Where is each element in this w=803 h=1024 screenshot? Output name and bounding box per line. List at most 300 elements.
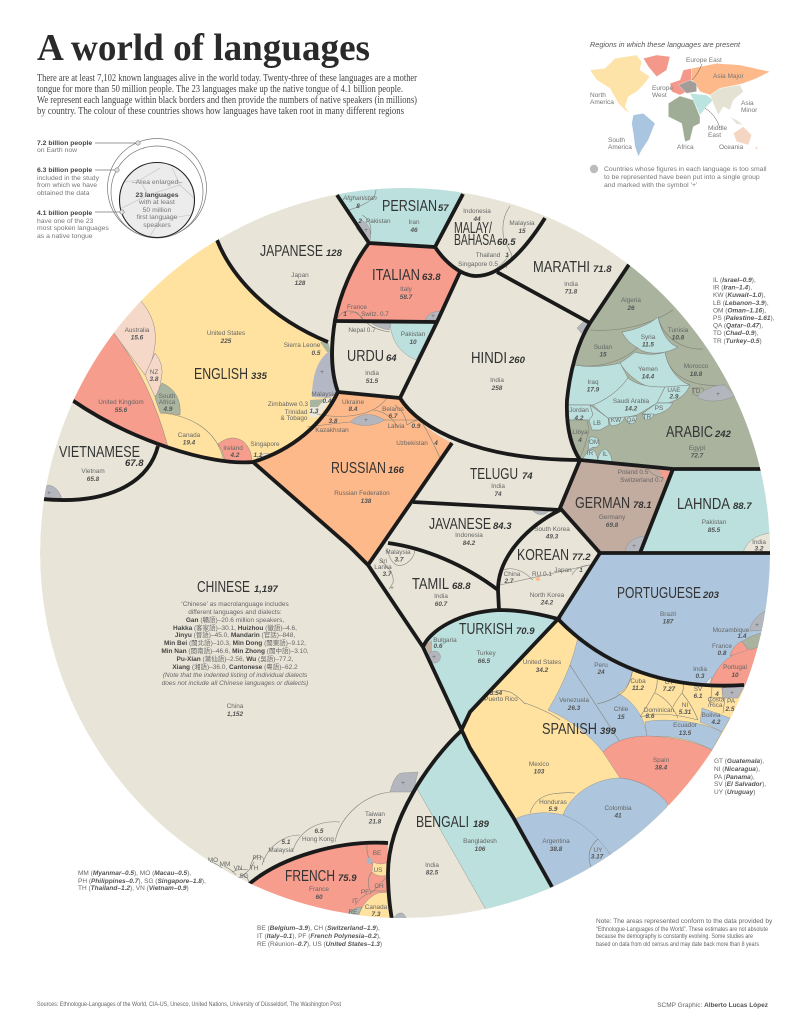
panel: Urdu <box>347 323 436 385</box>
panel: Turkish: Bulgaria <box>433 637 457 644</box>
legend: world map of regions: Regions in which these languages are present <box>590 40 741 49</box>
panel: Russian: 6.7 <box>389 413 398 420</box>
title: A world of languages <box>37 27 370 69</box>
panel: Korean: 2.7 <box>504 578 514 585</box>
panel: Spanish <box>464 622 746 890</box>
panel: Russian: Kazakhstan <box>315 427 349 434</box>
panel: Chinese: Min Bei (閩北語)–10.3, Min Dong (閩東語)–9.12, <box>164 638 306 647</box>
panel: Chinese: Xiang (湘語)–36.0, Cantonese (粵語)–62.2 <box>172 662 298 671</box>
legend: world map of regions: America <box>608 144 632 151</box>
panel: Malay / Bahasa: 60.5 <box>497 237 516 248</box>
panel: German: 69.8 <box>606 522 619 529</box>
note: Chinese abbreviations <box>78 870 206 892</box>
panel: Russian: Latvia <box>387 423 405 430</box>
panel: Persian: 46 <box>409 227 418 234</box>
panel: Chinese: PH <box>253 855 262 862</box>
panel: Arabic: TD <box>692 388 701 395</box>
legend: population circles: on Earth now <box>37 147 77 154</box>
note: Arabic abbreviations: QA (Qatar–0.47), <box>713 322 763 330</box>
panel: English: 15.6 <box>131 334 144 342</box>
panel: Lahnda: Pakistan <box>702 519 726 526</box>
panel: English: 4.9 <box>163 406 173 413</box>
panel: English <box>73 240 336 460</box>
note: French abbreviations: IT (Italy–0.1), PF (French Polynesia–0.2), <box>257 933 381 940</box>
panel: Arabic: 4 <box>577 437 582 444</box>
legend: world map of regions: Asia <box>741 100 754 107</box>
panel: Spanish: Ecuador <box>673 722 697 729</box>
panel: French: RE <box>349 909 357 916</box>
panel: Korean: 24.2 <box>540 600 554 606</box>
panel: Persian: 8 <box>356 203 360 210</box>
legend: world map of regions: Minor <box>741 107 758 114</box>
panel: Arabic: 72.7 <box>691 452 704 460</box>
panel: Persian: Afghanistan <box>342 195 377 202</box>
panel: Tamil <box>374 548 471 608</box>
panel: Arabic: Syria <box>641 334 655 341</box>
panel: Portuguese: 0.3 <box>696 673 705 680</box>
panel: Spanish: 2.5 <box>725 706 735 713</box>
panel: Telugu: 74 <box>494 491 502 498</box>
panel: Arabic: 11.5 <box>642 342 654 348</box>
panel: Hindi: HINDI <box>471 350 507 367</box>
panel: Spanish: 13.5 <box>679 730 692 737</box>
legend: population circles: –Area enlarged– <box>132 179 182 186</box>
intro text: by country. The colour of these countries shows how languages have taken root in many different regions <box>37 106 404 117</box>
panel: Chinese: 1,197 <box>254 584 278 595</box>
panel: Spanish: 3.54 <box>490 690 503 697</box>
note: Chinese abbreviations: TH (Thailand–1.2), VN (Vietnam–0.9) <box>78 885 189 892</box>
legend: population circles <box>37 138 206 240</box>
panel: Russian: 8.4 <box>349 406 358 413</box>
panel: Lahnda: 3.2 <box>755 546 764 552</box>
legend: world map of regions: North <box>590 92 606 99</box>
panel: Arabic: OM <box>589 439 599 446</box>
panel: Bengali: BENGALI <box>416 814 469 831</box>
panel: German: + <box>632 543 636 550</box>
panel: Italian: France <box>347 304 367 311</box>
legend: world map of regions: Oceania <box>719 144 744 151</box>
panel: English: 19.4 <box>183 440 196 446</box>
legend: population circles: first language <box>137 214 178 221</box>
note: Arabic abbreviations <box>713 277 775 345</box>
panel: Malay / Bahasa: Indonesia <box>463 208 491 215</box>
panel: German: Poland 0.5 <box>618 469 649 476</box>
panel: Chinese: Hong Kong <box>302 836 334 843</box>
panel: Arabic: Libya <box>572 429 588 436</box>
panel: Chinese: CHINESE <box>197 579 250 596</box>
legend: population circles: 6.3 billion people <box>37 167 92 174</box>
legend: world map of regions: America <box>590 99 614 106</box>
panel: Urdu: URDU <box>347 348 384 365</box>
panel: Spanish: 11.2 <box>632 685 644 692</box>
legend: world map of regions: Europe <box>652 85 673 92</box>
panel: Spanish: SPANISH <box>542 721 597 738</box>
panel: Chinese: China <box>227 703 243 710</box>
note: Arabic abbreviations: OM (Oman–1.16), <box>713 308 766 314</box>
panel: Portuguese <box>560 554 770 686</box>
panel: English: & Tobago <box>281 415 308 422</box>
panel: Arabic: + <box>716 391 720 398</box>
panel: Spanish: 7.27 <box>663 686 676 693</box>
panel: Arabic: Tunisia <box>668 327 688 334</box>
panel: Turkish: 0.6 <box>434 643 443 650</box>
panel: Portuguese: Brazil <box>660 611 676 618</box>
panel: French: CH <box>374 883 384 890</box>
panel: Tamil: India <box>434 593 448 600</box>
panel: Japanese: Japan <box>291 272 309 279</box>
panel: Marathi: 71.8 <box>565 288 578 296</box>
panel: Tamil: 60.7 <box>435 601 448 608</box>
panel: Italian: 1 <box>343 311 347 318</box>
panel: Persian: Pakistan <box>366 218 391 225</box>
note: Arabic abbreviations: PS (Palestine–1.61), <box>713 315 775 322</box>
panel: Russian: 4 <box>433 440 438 447</box>
panel: Chinese: + <box>401 780 405 787</box>
panel: Russian: 166 <box>388 465 405 476</box>
legend: world map of regions <box>590 40 770 189</box>
panel: Arabic: 242 <box>714 429 732 440</box>
panel: English: Ireland <box>223 445 243 452</box>
panel: Chinese <box>161 579 418 885</box>
panel: Italian: + <box>431 313 435 320</box>
panel: German: GERMAN <box>575 495 630 512</box>
panel: Persian: + <box>364 227 368 234</box>
panel: Russian: 138 <box>361 498 372 505</box>
panel: French: BE <box>373 850 381 857</box>
panel: Korean: Japan <box>554 567 572 574</box>
legend: world map of regions: and marked with the symbol ‘+’ <box>604 182 698 189</box>
panel: Spanish: Colombia <box>604 805 632 812</box>
panel: Arabic: 15 <box>599 352 607 358</box>
legend: world map of regions: West <box>652 92 667 99</box>
panel: Arabic: Jordan <box>569 407 589 414</box>
intro text <box>37 73 417 117</box>
panel: Spanish: 5.9 <box>549 806 558 813</box>
panel: Malay / Bahasa: 15 <box>518 228 526 235</box>
panel: Spanish: 6.1 <box>694 693 703 700</box>
legend: world map of regions: Countries whose figures in each language is too small <box>604 166 767 173</box>
legend: world map of regions: to be represented have been put into a single group <box>604 174 760 181</box>
panel: Chinese: VN <box>234 865 243 872</box>
panel: Korean: North Korea <box>530 592 564 599</box>
panel: Italian: Italy <box>400 286 412 293</box>
legend: population circles: from which we have <box>37 182 97 189</box>
intro text: We represent each language within black borders and then provide the numbers of native speakers (in millions) <box>37 95 417 106</box>
panel: Vietnamese: + <box>47 490 51 497</box>
note: Arabic abbreviations: IR (Iran–1.4), <box>713 284 752 292</box>
panel: Spanish: Mexico <box>529 761 549 768</box>
legend: population circles: most spoken languages <box>37 225 109 232</box>
panel: Turkish: 66.5 <box>478 658 491 665</box>
panel: English: + <box>320 369 324 376</box>
panel: Persian: PERSIAN <box>382 198 437 215</box>
panel: Arabic: Morocco <box>684 363 708 370</box>
panel: Hindi: India <box>490 377 504 384</box>
panel: Tamil: + <box>390 585 394 592</box>
panel: Spanish: 103 <box>534 768 545 776</box>
panel: Javanese: JAVANESE <box>429 516 491 533</box>
panel: French: PF <box>361 889 369 896</box>
panel: English: United States <box>207 330 245 337</box>
panel: Bengali: India <box>425 862 439 869</box>
panel: Tamil: Malaysia <box>385 549 411 556</box>
panel: Marathi: 71.8 <box>593 264 612 275</box>
panel: English: 3.8 <box>150 376 159 383</box>
note: Arabic abbreviations: TR (Turkey–0.5) <box>713 338 762 345</box>
panel: Arabic: 14.2 <box>625 406 638 412</box>
panel: German: 78.1 <box>633 500 652 511</box>
panel: English: 0.4 <box>323 398 332 405</box>
panel: English: Trinidad <box>285 409 308 416</box>
panel: Malay / Bahasa <box>454 206 535 270</box>
panel: Marathi <box>534 261 612 294</box>
panel: Bengali: 106 <box>475 846 486 853</box>
panel: Korean <box>500 526 591 606</box>
panel: Arabic: Egypt <box>689 445 705 452</box>
panel: English: South <box>159 393 176 400</box>
panel: Korean: 49.3 <box>545 534 559 540</box>
panel: English: 1.3 <box>310 408 319 415</box>
panel: Tamil: TAMIL <box>412 576 449 593</box>
panel: Arabic: IL <box>602 451 608 458</box>
panel: English: Australia <box>125 327 149 334</box>
panel: Portuguese: 1.4 <box>738 633 747 640</box>
panel: Arabic: Saudi Arabia <box>613 398 649 405</box>
panel: Spanish: 24 <box>596 669 605 676</box>
panel: Portuguese: Mozambique <box>713 627 750 634</box>
panel: Telugu: TELUGU <box>470 466 518 483</box>
panel: Spanish: Spain <box>653 757 669 764</box>
panel: Malay / Bahasa: 1 <box>505 252 509 259</box>
panel: Arabic: 2.9 <box>669 394 679 400</box>
panel: Chinese: Min Nan (閩南語)–46.6, Min Zhong (閩中語)–3.10, <box>161 646 309 655</box>
panel: Vietnamese: VIETNAMESE <box>59 444 140 461</box>
panel: Lahnda: India <box>752 539 766 546</box>
panel: Spanish: Rica <box>710 702 723 709</box>
panel: Arabic: UAE <box>667 387 681 394</box>
panel: Arabic: 18.8 <box>690 371 703 378</box>
panel: Portuguese: 10 <box>731 672 739 679</box>
panel: Arabic: Sudan <box>594 344 612 351</box>
panel: Spanish: PA <box>727 698 735 705</box>
note: Spanish abbreviations <box>714 758 766 796</box>
panel: Telugu: 74 <box>522 471 533 482</box>
panel: Chinese: SG <box>239 873 249 880</box>
legend: population circles: 23 languages <box>135 192 179 199</box>
panel: Spanish: GT <box>665 679 673 686</box>
panel: Arabic: KW <box>611 417 622 424</box>
panel: Russian: Ukraine <box>342 399 364 406</box>
panel: Russian: 3.8 <box>329 418 338 425</box>
panel: Vietnamese: 67.8 <box>125 458 144 469</box>
panel: Chinese: 1,152 <box>227 711 243 718</box>
panel: Marathi: MARATHI <box>533 259 590 276</box>
panel: Arabic: 10.8 <box>672 334 685 342</box>
panel: Hindi: 260 <box>508 355 526 366</box>
panel: Spanish: Costa <box>708 696 725 704</box>
panel: Spanish: 34.2 <box>536 667 549 674</box>
note: French abbreviations <box>257 925 382 948</box>
panel: Spanish: 15 <box>617 714 625 721</box>
legend: population circles: as a native tongue <box>37 233 93 240</box>
panel: Arabic: Yemen <box>638 366 658 373</box>
note: Spanish abbreviations: PA (Panama), <box>714 774 755 781</box>
panel: Spanish: Honduras <box>539 799 567 806</box>
panel: Spanish: 4 <box>714 691 719 698</box>
panel: German: Switzerland 0.7 <box>620 477 664 484</box>
note: French abbreviations: BE (Belgium–3.9), CH (Switzerland–1.9), <box>257 925 380 932</box>
note: Arabic abbreviations: KW (Kuwait–1.0), <box>713 292 766 299</box>
panel: Spanish: 3.17 <box>591 854 604 860</box>
panel: Vietnamese: 65.8 <box>87 476 100 483</box>
panel: Spanish: Chile <box>614 706 628 713</box>
panel: French: FRENCH <box>285 868 335 885</box>
panel: Spanish: 26.3 <box>567 705 581 712</box>
panel: Urdu: 10 <box>409 339 417 346</box>
panel: Lahnda: LAHNDA <box>677 496 731 513</box>
note: data caveat <box>596 918 773 948</box>
note: French abbreviations: RE (Réunion–0.7), US (United States–1.3) <box>257 941 382 948</box>
panel: English: Sierra Leone <box>284 342 321 349</box>
panel: Arabic: LB <box>593 420 601 427</box>
note: Spanish abbreviations: GT (Guatemala), <box>714 758 764 765</box>
chart: circle of languages <box>36 170 800 930</box>
panel: Portuguese: PORTUGUESE <box>617 585 701 602</box>
panel: Chinese: does not include all Chinese languages or dialects) <box>162 680 308 687</box>
panel: English: 55.6 <box>115 407 128 414</box>
panel: Telugu: India <box>491 483 505 490</box>
panel: Urdu: India <box>365 370 379 377</box>
panel: Malay / Bahasa: 44 <box>472 216 481 223</box>
panel: French: US <box>374 867 382 874</box>
panel: Japanese: JAPANESE <box>260 243 323 260</box>
panel: Chinese: (Note that the indented listing of individual dialects <box>163 672 308 679</box>
note: data caveat: because the demography is constantly evolving. Some studies are <box>596 933 753 940</box>
panel: Hindi: 258 <box>491 385 503 392</box>
panel: Korean: 1 <box>579 567 583 574</box>
panel: Russian: Belarus <box>382 406 404 413</box>
panel: German <box>560 460 673 553</box>
panel: Japanese: 128 <box>326 248 343 259</box>
panel: French: 75.9 <box>338 873 357 884</box>
panel: Malay / Bahasa: BAHASA <box>454 232 496 249</box>
legend: world map of regions: Europe East <box>686 57 722 64</box>
panel: Chinese: ‘Chinese’ as macrolanguage includes <box>181 601 289 608</box>
note: Spanish abbreviations: UY (Uruguay) <box>714 789 755 796</box>
panel: Persian <box>338 188 462 245</box>
panel: Javanese <box>429 511 549 547</box>
panel: English: 0.5 <box>312 350 321 357</box>
panel: Arabic: Algeria <box>621 297 641 304</box>
panel: English: 335 <box>251 371 268 382</box>
note: Chinese abbreviations: MM (Myanmar–0.5), MO (Macau–0.5), <box>78 870 191 877</box>
panel: French <box>250 844 393 918</box>
panel: Portuguese: 0.8 <box>718 650 727 657</box>
panel: Vietnamese: Vietnam <box>81 468 105 475</box>
panel: French: 60 <box>315 894 323 901</box>
panel: Chinese: TH <box>250 865 259 872</box>
panel: Malay / Bahasa: Malaysia <box>509 220 535 227</box>
panel: English: Canada <box>178 432 200 439</box>
panel: Lahnda: 88.7 <box>733 501 752 512</box>
panel: Spanish: 41 <box>613 812 622 820</box>
legend: population circles: with at least <box>138 199 175 206</box>
panel: Telugu <box>470 468 532 496</box>
panel: Spanish: + <box>730 690 734 697</box>
legend: world map of regions: Africa <box>677 144 694 151</box>
panel: Malay / Bahasa: Thailand <box>476 252 501 259</box>
panel: Spanish: 8.6 <box>646 713 655 720</box>
panel: Arabic: PS <box>655 405 663 412</box>
panel: Spanish: 4.2 <box>711 719 721 726</box>
panel: Japanese <box>260 243 343 287</box>
panel: Marathi: India <box>564 281 578 288</box>
panel: Russian: 0.9 <box>412 423 421 430</box>
legend: population circles: 50 million <box>143 207 172 214</box>
panel: Spanish: Peru <box>594 662 608 669</box>
panel: Tamil: Sri <box>379 558 387 565</box>
panel: English: ENGLISH <box>194 366 248 383</box>
panel: Urdu: 51.5 <box>366 378 379 385</box>
panel: Spanish: 38.4 <box>655 764 668 772</box>
panel: Bengali <box>393 731 552 930</box>
panel: Italian <box>335 243 460 322</box>
panel: English: Singapore <box>250 441 280 448</box>
legend: population circles: obtained the data <box>37 190 90 197</box>
note: data caveat: “Ethnologue-Languages of the World”. These estimates are not absolute <box>596 926 768 933</box>
panel: Spanish: Puerto Rico <box>484 696 518 703</box>
legend: population circles: speakers <box>143 222 171 229</box>
panel: Italian: 63.8 <box>422 272 441 283</box>
legend: population circles: included in the study <box>37 175 100 182</box>
panel: Arabic: TR <box>643 414 652 421</box>
panel: Spanish: Argentina <box>542 838 570 845</box>
panel: Italian: Switz. 0.7 <box>361 311 389 318</box>
panel: Arabic <box>568 265 760 469</box>
intro text: tongue for more than 50 million people. The 23 languages make up the native tongue of 4.1 billion people. <box>37 84 403 95</box>
panel: Spanish: 5.31 <box>679 709 692 716</box>
panel: English: United Kingdom <box>98 399 144 406</box>
panel: Chinese: MO <box>208 857 218 864</box>
panel: German: Germany <box>599 514 625 521</box>
panel: Portuguese: Portugal <box>723 664 747 671</box>
panel: English: 4.2 <box>230 452 240 459</box>
panel: Javanese: 84.2 <box>463 540 476 547</box>
panel: Turkish: TURKISH <box>459 621 513 638</box>
panel: Portuguese: 203 <box>702 590 720 601</box>
panel: Malay / Bahasa: MALAY/ <box>454 220 492 237</box>
panel: Korean: KOREAN <box>517 547 569 564</box>
legend: population circles: have one of the 23 <box>37 218 94 225</box>
panel: Portuguese: + <box>755 622 759 629</box>
panel: Bengali: Bangladesh <box>463 838 497 845</box>
panel: Arabic: 14.4 <box>642 374 655 380</box>
panel: Arabic: Iraq <box>587 379 599 386</box>
panel: English: 1.1 <box>254 452 263 459</box>
panel: Spanish: United States <box>523 659 561 666</box>
panel: Arabic: 26 <box>626 305 635 312</box>
panel: Tamil: Lanka <box>374 564 392 571</box>
panel: Bengali: 82.5 <box>426 870 439 876</box>
panel: Lahnda <box>643 469 770 552</box>
panel: Chinese: Malaysia <box>268 847 294 854</box>
panel: Spanish: 399 <box>600 726 617 737</box>
legend: world map of regions: South <box>608 137 625 144</box>
panel: Vietnamese <box>44 446 144 499</box>
panel: Bengali: 189 <box>473 819 490 830</box>
panel: English: Zimbabwe 0.3 <box>268 401 309 408</box>
panel: Korean: RU 0.1 <box>532 571 552 578</box>
